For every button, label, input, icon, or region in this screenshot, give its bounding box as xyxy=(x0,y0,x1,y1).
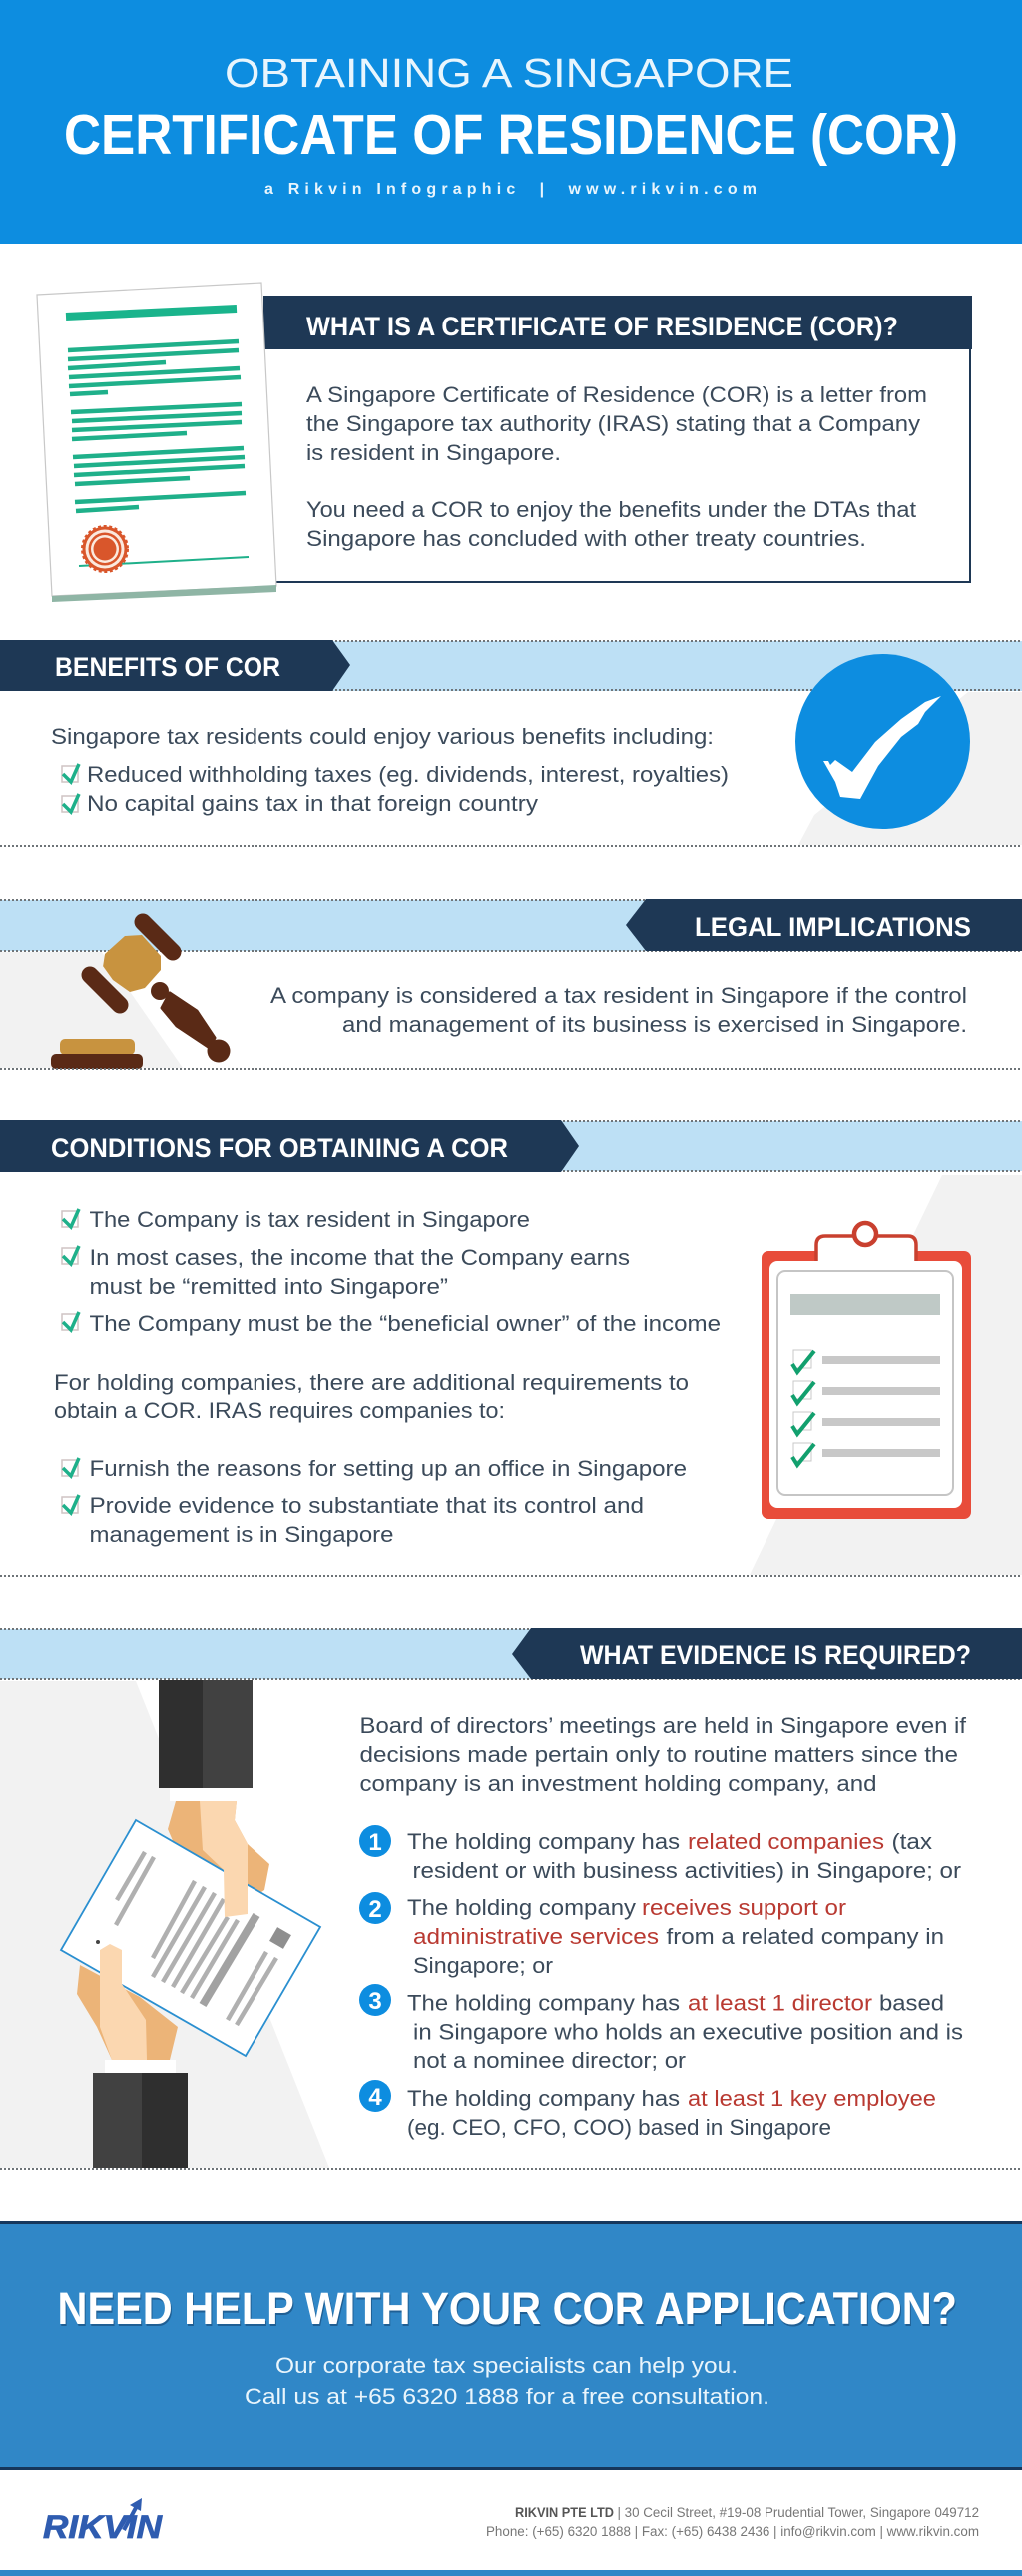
icon: check xyxy=(62,1246,79,1264)
benefits text: Reduced withholding taxes (eg. dividends, interest, royalties) xyxy=(87,762,729,787)
section heading: legal implications: LEGAL IMPLICATIONS xyxy=(695,912,971,942)
call to action text: Our corporate tax specialists can help you. xyxy=(275,2353,738,2378)
section heading: benefits of COR xyxy=(0,640,1022,691)
evidence intro text: company is an investment holding company, and xyxy=(359,1771,876,1796)
icon: check xyxy=(62,1312,79,1330)
benefits text: Singapore tax residents could enjoy various benefits including: xyxy=(51,724,714,749)
decorative wedge behind hands xyxy=(0,1681,329,2168)
evidence intro text: decisions made pertain only to routine matters since the xyxy=(359,1742,958,1767)
number badge 4: 4 xyxy=(368,2084,382,2111)
icon: check badge xyxy=(795,654,970,829)
evidence item 3: The holding company has xyxy=(407,1991,680,2015)
evidence item 3: at least 1 director xyxy=(688,1991,873,2015)
panel body text: Singapore has concluded with other treaty countries. xyxy=(306,526,866,551)
evidence item 1: related companies xyxy=(688,1829,884,1854)
icon: check xyxy=(62,764,79,782)
number badge 1: 1 xyxy=(368,1829,382,1856)
conditions text: Furnish the reasons for setting up an office in Singapore xyxy=(90,1456,687,1481)
footer bar xyxy=(0,2570,1022,2576)
evidence item 1: The holding company has xyxy=(407,1829,680,1854)
evidence item 2: from a related company in xyxy=(667,1924,944,1949)
icon: certificate document xyxy=(37,283,276,602)
conditions text: In most cases, the income that the Company earns xyxy=(90,1245,630,1270)
logo: Rikvin: RIKVIN xyxy=(43,2509,163,2545)
conditions text xyxy=(54,1207,721,1547)
conditions text: Provide evidence to substantiate that its control and xyxy=(90,1493,644,1518)
number badge 3: 3 xyxy=(368,1988,382,2015)
evidence item 1: (tax xyxy=(892,1829,933,1854)
evidence intro text xyxy=(359,1713,967,1796)
icon: gavel xyxy=(51,922,230,1069)
panel body text: A Singapore Certificate of Residence (COR) is a letter from xyxy=(306,382,927,407)
evidence item 4: The holding company has xyxy=(407,2086,680,2111)
icon: check xyxy=(62,1458,79,1476)
conditions text: management is in Singapore xyxy=(90,1522,393,1547)
section heading: benefits of COR: BENEFITS OF COR xyxy=(55,652,280,682)
top sleeve xyxy=(159,1680,253,1788)
evidence item 4 xyxy=(359,2080,936,2140)
benefits text: No capital gains tax in that foreign country xyxy=(87,791,539,816)
footer contact text: Phone: (+65) 6320 1888 | Fax: (+65) 6438 2436 | info@rikvin.com | www.rikvin.com xyxy=(486,2524,979,2539)
number badge 1 xyxy=(359,1825,391,1857)
evidence item 1: resident or with business activities) in Singapore; or xyxy=(413,1858,962,1883)
panel heading bar xyxy=(263,296,972,349)
panel frame xyxy=(200,339,970,582)
document xyxy=(61,1820,320,2056)
evidence item 3: not a nominee director; or xyxy=(413,2048,687,2073)
evidence item 4: at least 1 key employee xyxy=(688,2086,936,2111)
icon: hands exchanging document xyxy=(61,1680,320,2168)
panel: what is a COR xyxy=(200,296,972,582)
legal text xyxy=(270,983,967,1037)
call to action text: Call us at +65 6320 1888 for a free consultation. xyxy=(245,2384,769,2409)
section heading: evidence: WHAT EVIDENCE IS REQUIRED? xyxy=(580,1640,971,1670)
decorative wedge behind gavel xyxy=(0,952,183,1068)
icon: seal xyxy=(82,527,128,571)
decorative wedge behind clipboard xyxy=(750,1175,1022,1575)
section heading: evidence xyxy=(0,1628,1022,1679)
decorative wedge behind check badge xyxy=(798,692,1022,845)
icon: check xyxy=(62,1209,79,1227)
evidence item 2: Singapore; or xyxy=(413,1953,554,1978)
evidence item 2: The holding company xyxy=(407,1895,637,1920)
icon: check xyxy=(62,794,79,812)
logo: Rikvin xyxy=(43,2498,163,2545)
footer contact text xyxy=(486,2505,979,2539)
conditions text: For holding companies, there are additional requirements to xyxy=(54,1370,689,1395)
number badge 4 xyxy=(359,2080,391,2112)
evidence item 3: based xyxy=(879,1991,944,2015)
number badge 2 xyxy=(359,1892,391,1924)
section heading: conditions xyxy=(0,1120,1022,1172)
evidence item 3: in Singapore who holds an executive position and is xyxy=(413,2019,963,2045)
evidence item 3 xyxy=(359,1984,963,2073)
panel body text xyxy=(306,382,927,551)
evidence item 2: administrative services xyxy=(413,1924,659,1949)
evidence item 4: (eg. CEO, CFO, COO) based in Singapore xyxy=(407,2115,831,2140)
number badge 2: 2 xyxy=(368,1896,382,1923)
number badge 3 xyxy=(359,1984,391,2016)
legal text: A company is considered a tax resident in Singapore if the control xyxy=(270,983,967,1008)
icon: check xyxy=(62,1495,79,1513)
evidence item 2: receives support or xyxy=(642,1895,847,1920)
benefits text xyxy=(51,724,729,816)
call to action text xyxy=(245,2353,769,2409)
call to action banner xyxy=(0,2221,1022,2470)
section heading: conditions: CONDITIONS FOR OBTAINING A COR xyxy=(51,1133,508,1163)
call to action heading: NEED HELP WITH YOUR COR APPLICATION? xyxy=(58,2283,957,2334)
panel heading: WHAT IS A CERTIFICATE OF RESIDENCE (COR)? xyxy=(306,312,898,341)
panel body text: You need a COR to enjoy the benefits under the DTAs that xyxy=(306,497,917,522)
evidence item 2 xyxy=(359,1892,944,1978)
bottom sleeve xyxy=(93,2073,188,2168)
evidence item 1 xyxy=(359,1825,962,1883)
footer contact text: RIKVIN PTE LTD xyxy=(515,2505,614,2520)
legal text: and management of its business is exercised in Singapore. xyxy=(342,1012,967,1037)
panel body text: is resident in Singapore. xyxy=(306,440,561,465)
icon: clipboard xyxy=(762,1223,971,1519)
conditions text: The Company must be the “beneficial owner” of the income xyxy=(90,1311,721,1336)
section heading: legal implications xyxy=(0,899,1022,951)
footer contact text: | 30 Cecil Street, #19-08 Prudential Tower, Singapore 049712 xyxy=(617,2505,979,2520)
header banner xyxy=(0,0,1022,244)
panel body text: the Singapore tax authority (IRAS) stating that a Company xyxy=(306,411,921,436)
subtitle: a Rikvin Infographic | www.rikvin.com xyxy=(264,181,757,198)
conditions text: The Company is tax resident in Singapore xyxy=(90,1207,530,1232)
evidence intro text: Board of directors’ meetings are held in Singapore even if xyxy=(359,1713,967,1738)
title line 1: OBTAINING A SINGAPORE xyxy=(225,50,793,96)
conditions text: must be “remitted into Singapore” xyxy=(90,1274,448,1299)
conditions text: obtain a COR. IRAS requires companies to: xyxy=(54,1398,505,1423)
